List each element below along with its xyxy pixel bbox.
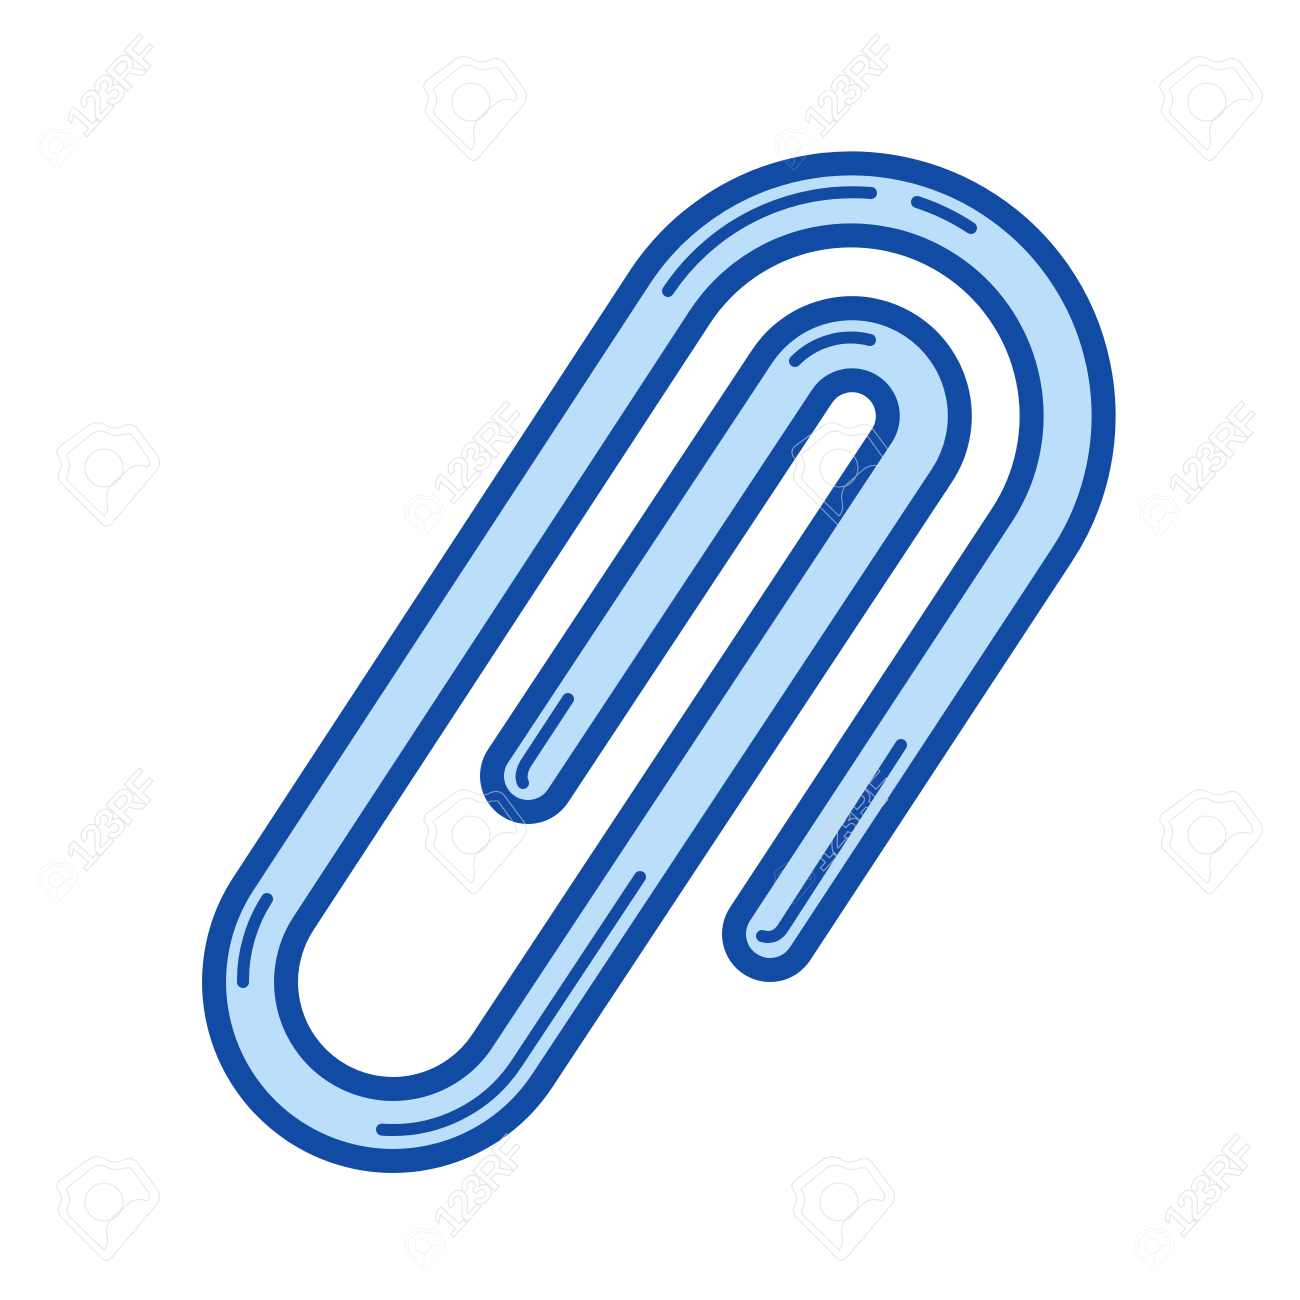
watermark text: 123RF: [423, 394, 537, 513]
watermark text: 123RF: [56, 761, 170, 880]
clip outline: [250, 199, 1068, 1125]
highlight strokes: [243, 192, 971, 1130]
clip light blue fill: [250, 199, 1068, 1125]
watermark text: 123RF: [1153, 1127, 1267, 1246]
watermark text: 123RF: [423, 1127, 537, 1246]
watermark text: 123RF: [793, 27, 907, 146]
watermark text: 123RF: [793, 761, 907, 880]
watermark text: 123RF: [1158, 394, 1272, 513]
watermark text: 123RF: [56, 27, 170, 146]
